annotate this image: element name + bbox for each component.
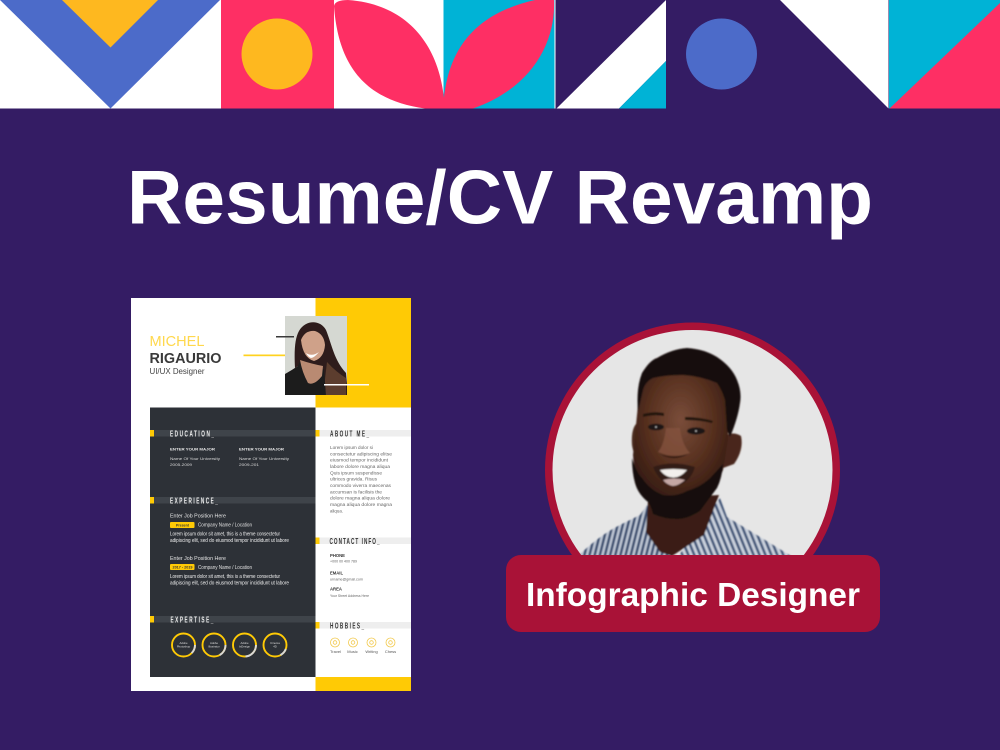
designer portrait xyxy=(506,322,880,632)
section: experience: Lorem ipsum dolor sit amet, this is a theme consectetur xyxy=(170,532,280,538)
skill ring 2 xyxy=(202,634,226,656)
skill ring 4 xyxy=(264,634,286,656)
resume name: RIGAURIO xyxy=(150,351,222,367)
section: about me: accumsan is facilisis the xyxy=(330,489,383,494)
dark panel xyxy=(150,408,316,677)
section: contact info: CONTACT INFO_ xyxy=(330,538,380,546)
section: hobbies xyxy=(316,622,411,654)
skill ring 1 xyxy=(172,634,195,656)
skill ring 3: InDesign xyxy=(239,644,250,648)
nose xyxy=(658,428,690,456)
section: experience: Present xyxy=(176,524,190,528)
resume name: UI/UX Designer xyxy=(150,367,205,376)
hair xyxy=(638,348,741,437)
section: education: EDUCATION_ xyxy=(170,430,214,439)
section: education: ENTER YOUR MAJOR xyxy=(239,446,284,452)
section: experience: adipiscing elit, sed do eiusmod tempor incididunt ut labore xyxy=(170,580,289,586)
left ear xyxy=(630,424,637,452)
section: about me: Lorem ipsum dolor si xyxy=(330,445,373,450)
geometric banner xyxy=(0,0,1000,108)
section: about me: dolore magna aliqua dolore xyxy=(330,496,391,501)
shirt left xyxy=(580,505,672,555)
section: experience: Enter Job Position Here xyxy=(170,514,226,520)
section: hobbies: Travel xyxy=(330,649,341,654)
section: experience: adipiscing elit, sed do eiusmod tempor incididunt ut labore xyxy=(170,538,289,544)
section: education: ENTER YOUR MAJOR xyxy=(170,446,215,452)
skill ring 1: Photoshop xyxy=(177,644,191,648)
section: contact info: PHONE xyxy=(330,553,345,558)
section: experience: 2017 - 2019 xyxy=(172,566,192,570)
section: contact info xyxy=(316,538,411,598)
blue circle block xyxy=(666,0,889,108)
section: contact info: Your Street Address Here xyxy=(330,594,369,598)
skill ring 3 xyxy=(233,634,256,656)
pink square with circle xyxy=(221,0,334,108)
section: education: Name Of Your University xyxy=(170,456,220,461)
skill ring 2: Adobe xyxy=(210,641,218,645)
resume name: MICHEL xyxy=(150,334,204,350)
section: contact info: AREA xyxy=(330,586,342,592)
section: experience xyxy=(150,497,316,586)
skill ring 4: Cinema xyxy=(270,641,280,645)
section: education: 2005-2009 xyxy=(170,462,193,467)
section: expertise: EXPERTISE_ xyxy=(170,616,214,625)
section: contact info: EMAIL xyxy=(330,570,343,576)
role badge xyxy=(506,555,880,632)
chevron xyxy=(0,0,220,108)
section: experience: Lorem ipsum dolor sit amet, this is a theme consectetur xyxy=(170,574,280,580)
leaf pair xyxy=(334,0,554,108)
section: experience: Company Name / Location xyxy=(198,522,252,528)
face xyxy=(633,368,728,505)
resume name xyxy=(150,334,222,376)
title: Resume/CV Revamp xyxy=(127,156,873,240)
section: hobbies: Music xyxy=(347,649,358,654)
section: education: 2009-201 xyxy=(239,462,260,467)
section: about me: magna aliqua dolore magna xyxy=(330,502,393,507)
section: expertise xyxy=(150,616,316,656)
portrait photo xyxy=(552,330,832,555)
section: education xyxy=(150,430,316,467)
skill ring 2: Illustrator xyxy=(208,644,220,648)
neck xyxy=(646,495,719,556)
section: about me: commodo viverra maecenas xyxy=(330,483,391,488)
section: experience: EXPERIENCE_ xyxy=(170,497,218,506)
section: about me: labore dolore magna aliqua xyxy=(330,464,391,469)
section: about me: ultrices gravida. Risus xyxy=(330,477,377,482)
resume document xyxy=(131,298,411,691)
beard xyxy=(632,458,723,519)
triangle square xyxy=(889,0,1000,108)
section: about me: aliqua. xyxy=(330,508,343,513)
section: about me: consectetur adipiscing elitse xyxy=(330,451,393,456)
section: about me xyxy=(316,430,411,513)
section: hobbies: Chess xyxy=(385,649,396,654)
skill ring 4: 4D xyxy=(273,644,277,648)
woman photo xyxy=(285,316,348,396)
diagonal square xyxy=(556,0,666,108)
eyes xyxy=(648,424,705,435)
skill ring 3: Adobe xyxy=(240,641,249,645)
shirt right xyxy=(679,498,791,555)
section: contact info: urname@gmail.com xyxy=(330,578,363,582)
section: hobbies: Writing xyxy=(365,649,378,654)
mouth xyxy=(653,464,695,486)
section: about me: eiusmod tempor incididunt xyxy=(330,458,389,463)
section: hobbies: HOBBIES_ xyxy=(330,622,364,631)
skill ring 1: Adobe xyxy=(179,641,188,645)
photo accent lines xyxy=(244,336,369,386)
section: education: Name Of Your University xyxy=(239,456,289,461)
section: experience: Company Name / Location xyxy=(198,565,252,571)
section: about me: ABOUT ME_ xyxy=(330,430,369,439)
portrait ring xyxy=(545,322,840,618)
brows xyxy=(643,412,713,423)
yellow header block xyxy=(316,298,411,408)
section: experience: Enter Job Position Here xyxy=(170,556,226,562)
yellow footer block xyxy=(316,677,411,691)
section: about me: Quis ipsum suspendisse xyxy=(330,470,383,475)
right ear xyxy=(723,434,742,468)
section: contact info: +000 00 400 789 xyxy=(330,560,357,564)
role label: Infographic Designer xyxy=(526,576,860,613)
